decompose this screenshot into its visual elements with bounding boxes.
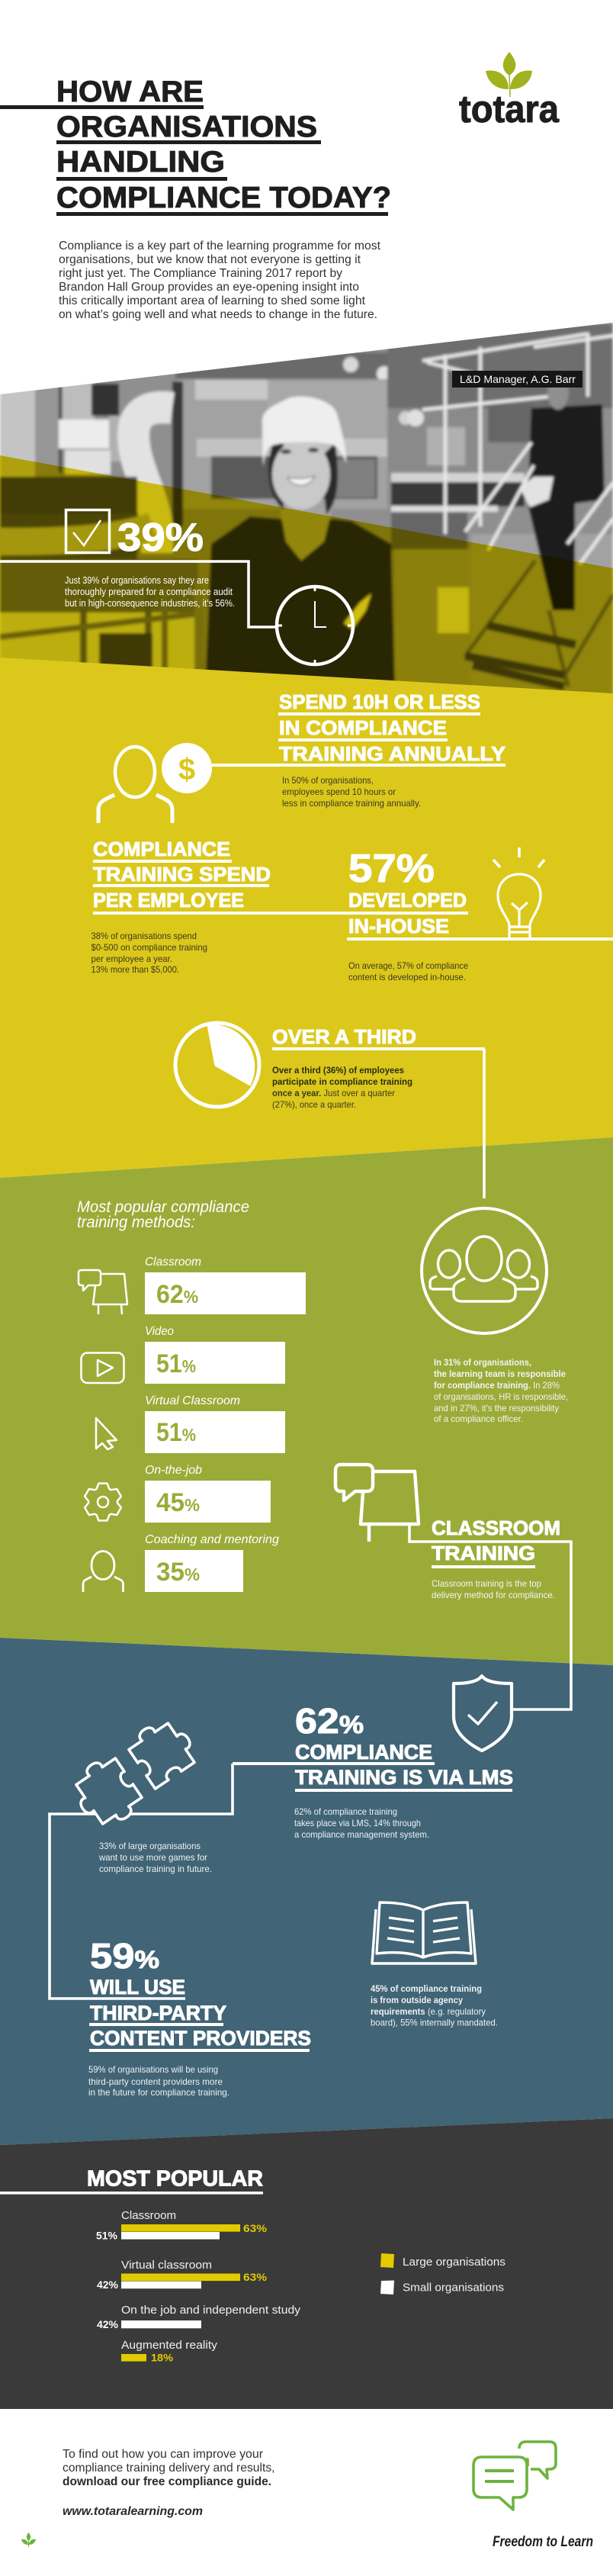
heading: 59% third-party: [89, 1936, 311, 2052]
bar: on-the-job 45%: On-the-job: [145, 1464, 202, 1477]
heading: most popular: MOST POPULAR: [87, 2166, 263, 2191]
text: spend per employee: [91, 931, 207, 975]
heading: 59% third-party: 59%: [90, 1936, 159, 1976]
icon: pie chart: [175, 1023, 259, 1107]
bar: on-the-job 45%: [145, 1464, 271, 1523]
icon: gear: [85, 1484, 121, 1520]
text: LMS: 62% of compliance training: [294, 1806, 397, 1817]
intro paragraph: this critically important area of learning to shed some light: [59, 294, 366, 307]
intro paragraph: Brandon Hall Group provides an eye-opening insight into: [59, 281, 359, 294]
icon: shield: [454, 1676, 512, 1751]
panel: blue section: [0, 1638, 613, 2145]
icon: chat bubbles: [473, 2442, 556, 2510]
text: responsibility: [434, 1357, 568, 1424]
title: [0, 76, 391, 216]
title: ORGANISATIONS: [56, 111, 317, 143]
heading: classroom training: [432, 1516, 560, 1568]
legend: Small organisations: [403, 2282, 504, 2295]
panel: green section: [0, 1137, 613, 1665]
heading: over a third: [272, 1025, 485, 1050]
text: over a third: [272, 1065, 412, 1110]
heading: spend 10h or less: [212, 690, 505, 767]
text: over a third: (27%), once a quarter.: [272, 1099, 356, 1110]
text: third-party: third-party content providers more: [88, 2076, 223, 2087]
icon: person with coin: [98, 743, 212, 823]
bar: video 51%: [145, 1325, 285, 1384]
text: in-house: On average, 57% of compliance: [348, 960, 468, 971]
caption: L&D Manager: [452, 371, 583, 388]
text: LMS: [294, 1806, 429, 1840]
text: over a third: Over a third (36%) of employees: [272, 1065, 404, 1076]
chart: most popular by organisation size: 18%: [151, 2352, 173, 2363]
chart: most popular by organisation size: 63%: [243, 2223, 267, 2234]
text: responsibility: for compliance training. In 28%: [434, 1380, 560, 1391]
heading: 62% via LMS: [233, 1701, 513, 1792]
text: spend per employee: 13% more than $5,000.: [91, 964, 179, 975]
text: spend per employee: 38% of organisations spend: [91, 931, 197, 941]
text: LMS: takes place via LMS, 14% through: [294, 1818, 421, 1828]
bar: classroom 62%: Classroom: [145, 1256, 201, 1269]
heading: 57% developed in-house: DEVELOPED: [348, 889, 467, 912]
text: spend per employee: $0-500 on compliance training: [91, 942, 207, 953]
connector: 39% to clock: [0, 561, 276, 627]
chart: most popular by organisation size: 42%: [97, 2319, 118, 2330]
intro paragraph: organisations, but we know that not everyone is getting it: [59, 253, 361, 266]
heading: 57% developed in-house: [347, 847, 613, 941]
bar: virtual classroom 51%: Virtual Classroom: [145, 1394, 240, 1407]
heading: most popular methods: Most popular compliance: [77, 1198, 249, 1216]
heading: most popular methods: [77, 1198, 249, 1231]
legend: [380, 2253, 505, 2295]
text: classroom training: Classroom training is the top: [432, 1578, 541, 1589]
stat: 39%: 39%: [117, 516, 204, 560]
bar: virtual classroom 51%: [145, 1394, 285, 1453]
text: responsibility: and in 27%, it’s the responsibility: [434, 1403, 559, 1413]
text: spend per employee: per employee a year.: [91, 954, 172, 964]
chart: most popular by organisation size: Classroom: [121, 2210, 176, 2222]
text: outside agency: is from outside agency: [371, 1995, 463, 2005]
intro paragraph: on what’s going well and what needs to change in the future.: [59, 308, 377, 321]
panel: dark section: [0, 2118, 613, 2409]
connector: classroom to shield: [409, 1524, 571, 1709]
heading: 59% third-party: CONTENT PROVIDERS: [90, 2027, 311, 2050]
icon: cursor: [96, 1418, 117, 1449]
text: 10 hours: employees spend 10 hours or: [282, 786, 396, 797]
title: HANDLING: [56, 146, 225, 178]
icon: puzzle pieces: [65, 1712, 201, 1835]
text: outside agency: 45% of compliance training: [371, 1983, 482, 1994]
text: 10 hours: [282, 775, 421, 809]
bar: virtual classroom 51%: 51%: [156, 1418, 196, 1447]
text: third-party: 59% of organisations will be using: [88, 2064, 218, 2075]
intro paragraph: right just yet. The Compliance Training 2017 report by: [59, 267, 342, 280]
text: over a third: once a year. Just over a quarter: [272, 1088, 395, 1098]
chart: most popular by organisation size: 63%: [243, 2272, 267, 2283]
text: responsibility: In 31% of organisations,: [434, 1357, 531, 1368]
connector: over a third to team: [483, 1049, 486, 1198]
intro paragraph: Compliance is a key part of the learning programme for most: [59, 240, 381, 252]
photo: factory worker with yellow overlay: [0, 320, 613, 702]
text: in-house: [348, 960, 468, 982]
text: outside agency: [371, 1983, 498, 2028]
heading: compliance training spend per employee: COMPLIANCE: [93, 838, 230, 860]
text: classroom training: delivery method for compliance.: [432, 1590, 555, 1600]
heading: 62% via LMS: COMPLIANCE: [295, 1741, 432, 1764]
icon: person: [83, 1552, 124, 1592]
heading: most popular methods: training methods:: [77, 1214, 195, 1231]
text: audit preparedness: Just 39% of organisations say they are: [65, 575, 209, 586]
text: audit preparedness: but in high-consequence industries, it’s 56%.: [65, 598, 235, 609]
text: 10 hours: In 50% of organisations,: [282, 775, 374, 786]
text: games: want to use more games for: [98, 1852, 207, 1863]
heading: most popular: [0, 2166, 263, 2195]
heading: 62% via LMS: TRAINING IS VIA LMS: [295, 1766, 513, 1789]
heading: compliance training spend per employee: PER EMPLOYEE: [93, 889, 244, 912]
text: responsibility: of organisations, HR is responsible,: [434, 1391, 568, 1402]
icon: clock: [276, 587, 354, 664]
bar: video 51%: 51%: [156, 1349, 196, 1378]
text: in-house: content is developed in-house.: [348, 972, 466, 982]
heading: spend 10h or less: TRAINING ANNUALLY: [279, 742, 505, 765]
heading: compliance training spend per employee: TRAINING SPEND: [93, 863, 271, 886]
heading: over a third: OVER A THIRD: [272, 1025, 416, 1048]
heading: compliance training spend per employee: [93, 838, 468, 915]
heading: 57% developed in-house: IN-HOUSE: [348, 915, 449, 937]
icon: flipchart large: [335, 1465, 419, 1542]
heading: 57% developed in-house: 57%: [348, 847, 435, 891]
heading: 59% third-party: THIRD-PARTY: [90, 2002, 226, 2024]
text: games: 33% of large organisations: [99, 1841, 201, 1851]
chart: most popular by organisation size: [96, 2210, 301, 2363]
text: responsibility: of a compliance officer.: [434, 1413, 523, 1424]
intro paragraph: [59, 240, 381, 321]
bar: coaching and mentoring 35%: 35%: [156, 1558, 200, 1587]
heading: spend 10h or less: IN COMPLIANCE: [279, 716, 447, 739]
call to action: To find out how you can improve your: [63, 2448, 264, 2461]
website: www.totaralearning.com: [63, 2505, 203, 2518]
text: games: compliance training in future.: [99, 1864, 212, 1874]
heading: classroom training: CLASSROOM: [432, 1516, 560, 1539]
text: audit preparedness: thoroughly prepared for a compliance audit: [65, 587, 233, 597]
logo: totara: totara: [459, 88, 560, 130]
bar: classroom 62%: 62%: [156, 1280, 198, 1309]
text: audit preparedness: [65, 575, 235, 609]
legend: Large organisations: [403, 2256, 505, 2269]
title: HOW ARE: [56, 76, 204, 108]
text: over a third: participate in compliance training: [272, 1076, 412, 1087]
caption: L&D Manager: L&D Manager, A.G. Barr: [460, 373, 576, 385]
call to action: download our free compliance guide.: [63, 2475, 271, 2488]
icon: light bulb: [493, 847, 544, 937]
icon: flipchart small: [79, 1270, 127, 1314]
icon: checkbox: [66, 510, 110, 552]
chart: most popular by organisation size: 51%: [96, 2230, 117, 2241]
text: outside agency: board), 55% internally mandated.: [371, 2017, 498, 2028]
icon: video play: [81, 1353, 124, 1383]
call to action: [63, 2448, 274, 2488]
chart: most popular by organisation size: Augmented reality: [121, 2340, 218, 2352]
tagline: Freedom to Learn: [493, 2534, 593, 2550]
bar: coaching and mentoring 35%: Coaching and mentoring: [145, 1533, 279, 1546]
text: third-party: [88, 2064, 229, 2098]
heading: classroom training: TRAINING: [432, 1542, 535, 1565]
text: 10 hours: less in compliance training annually.: [282, 798, 421, 809]
title: COMPLIANCE TODAY?: [56, 182, 391, 214]
text: responsibility: the learning team is responsible: [434, 1368, 566, 1379]
icon: person with coin: $: [178, 753, 195, 786]
panel: yellow section: [0, 658, 613, 1178]
text: games: [98, 1841, 212, 1874]
text: outside agency: requirements (e.g. regulatory: [371, 2006, 486, 2017]
text: LMS: a compliance management system.: [294, 1829, 429, 1840]
connector: LMS to 59%: [50, 1764, 233, 1999]
chart: most popular by organisation size: On the job and independent study: [121, 2304, 301, 2317]
icon: team in circle: [422, 1208, 547, 1333]
heading: 59% third-party: WILL USE: [90, 1976, 185, 1999]
bar: video 51%: Video: [145, 1325, 174, 1338]
chart: most popular by organisation size: 42%: [97, 2279, 118, 2291]
call to action: compliance training delivery and results,: [63, 2462, 274, 2475]
bar: on-the-job 45%: 45%: [156, 1488, 200, 1517]
chart: most popular by organisation size: Virtual classroom: [121, 2259, 212, 2272]
icon: open book: [372, 1902, 476, 1963]
bar: classroom 62%: [145, 1256, 306, 1314]
icon: small leaf: [21, 2533, 36, 2547]
text: third-party: in the future for compliance training.: [88, 2087, 229, 2098]
logo: totara: [459, 52, 560, 130]
heading: 62% via LMS: 62%: [295, 1701, 364, 1741]
text: classroom training: [432, 1578, 555, 1600]
bar: coaching and mentoring 35%: [145, 1533, 279, 1592]
heading: spend 10h or less: SPEND 10H OR LESS: [279, 690, 480, 713]
